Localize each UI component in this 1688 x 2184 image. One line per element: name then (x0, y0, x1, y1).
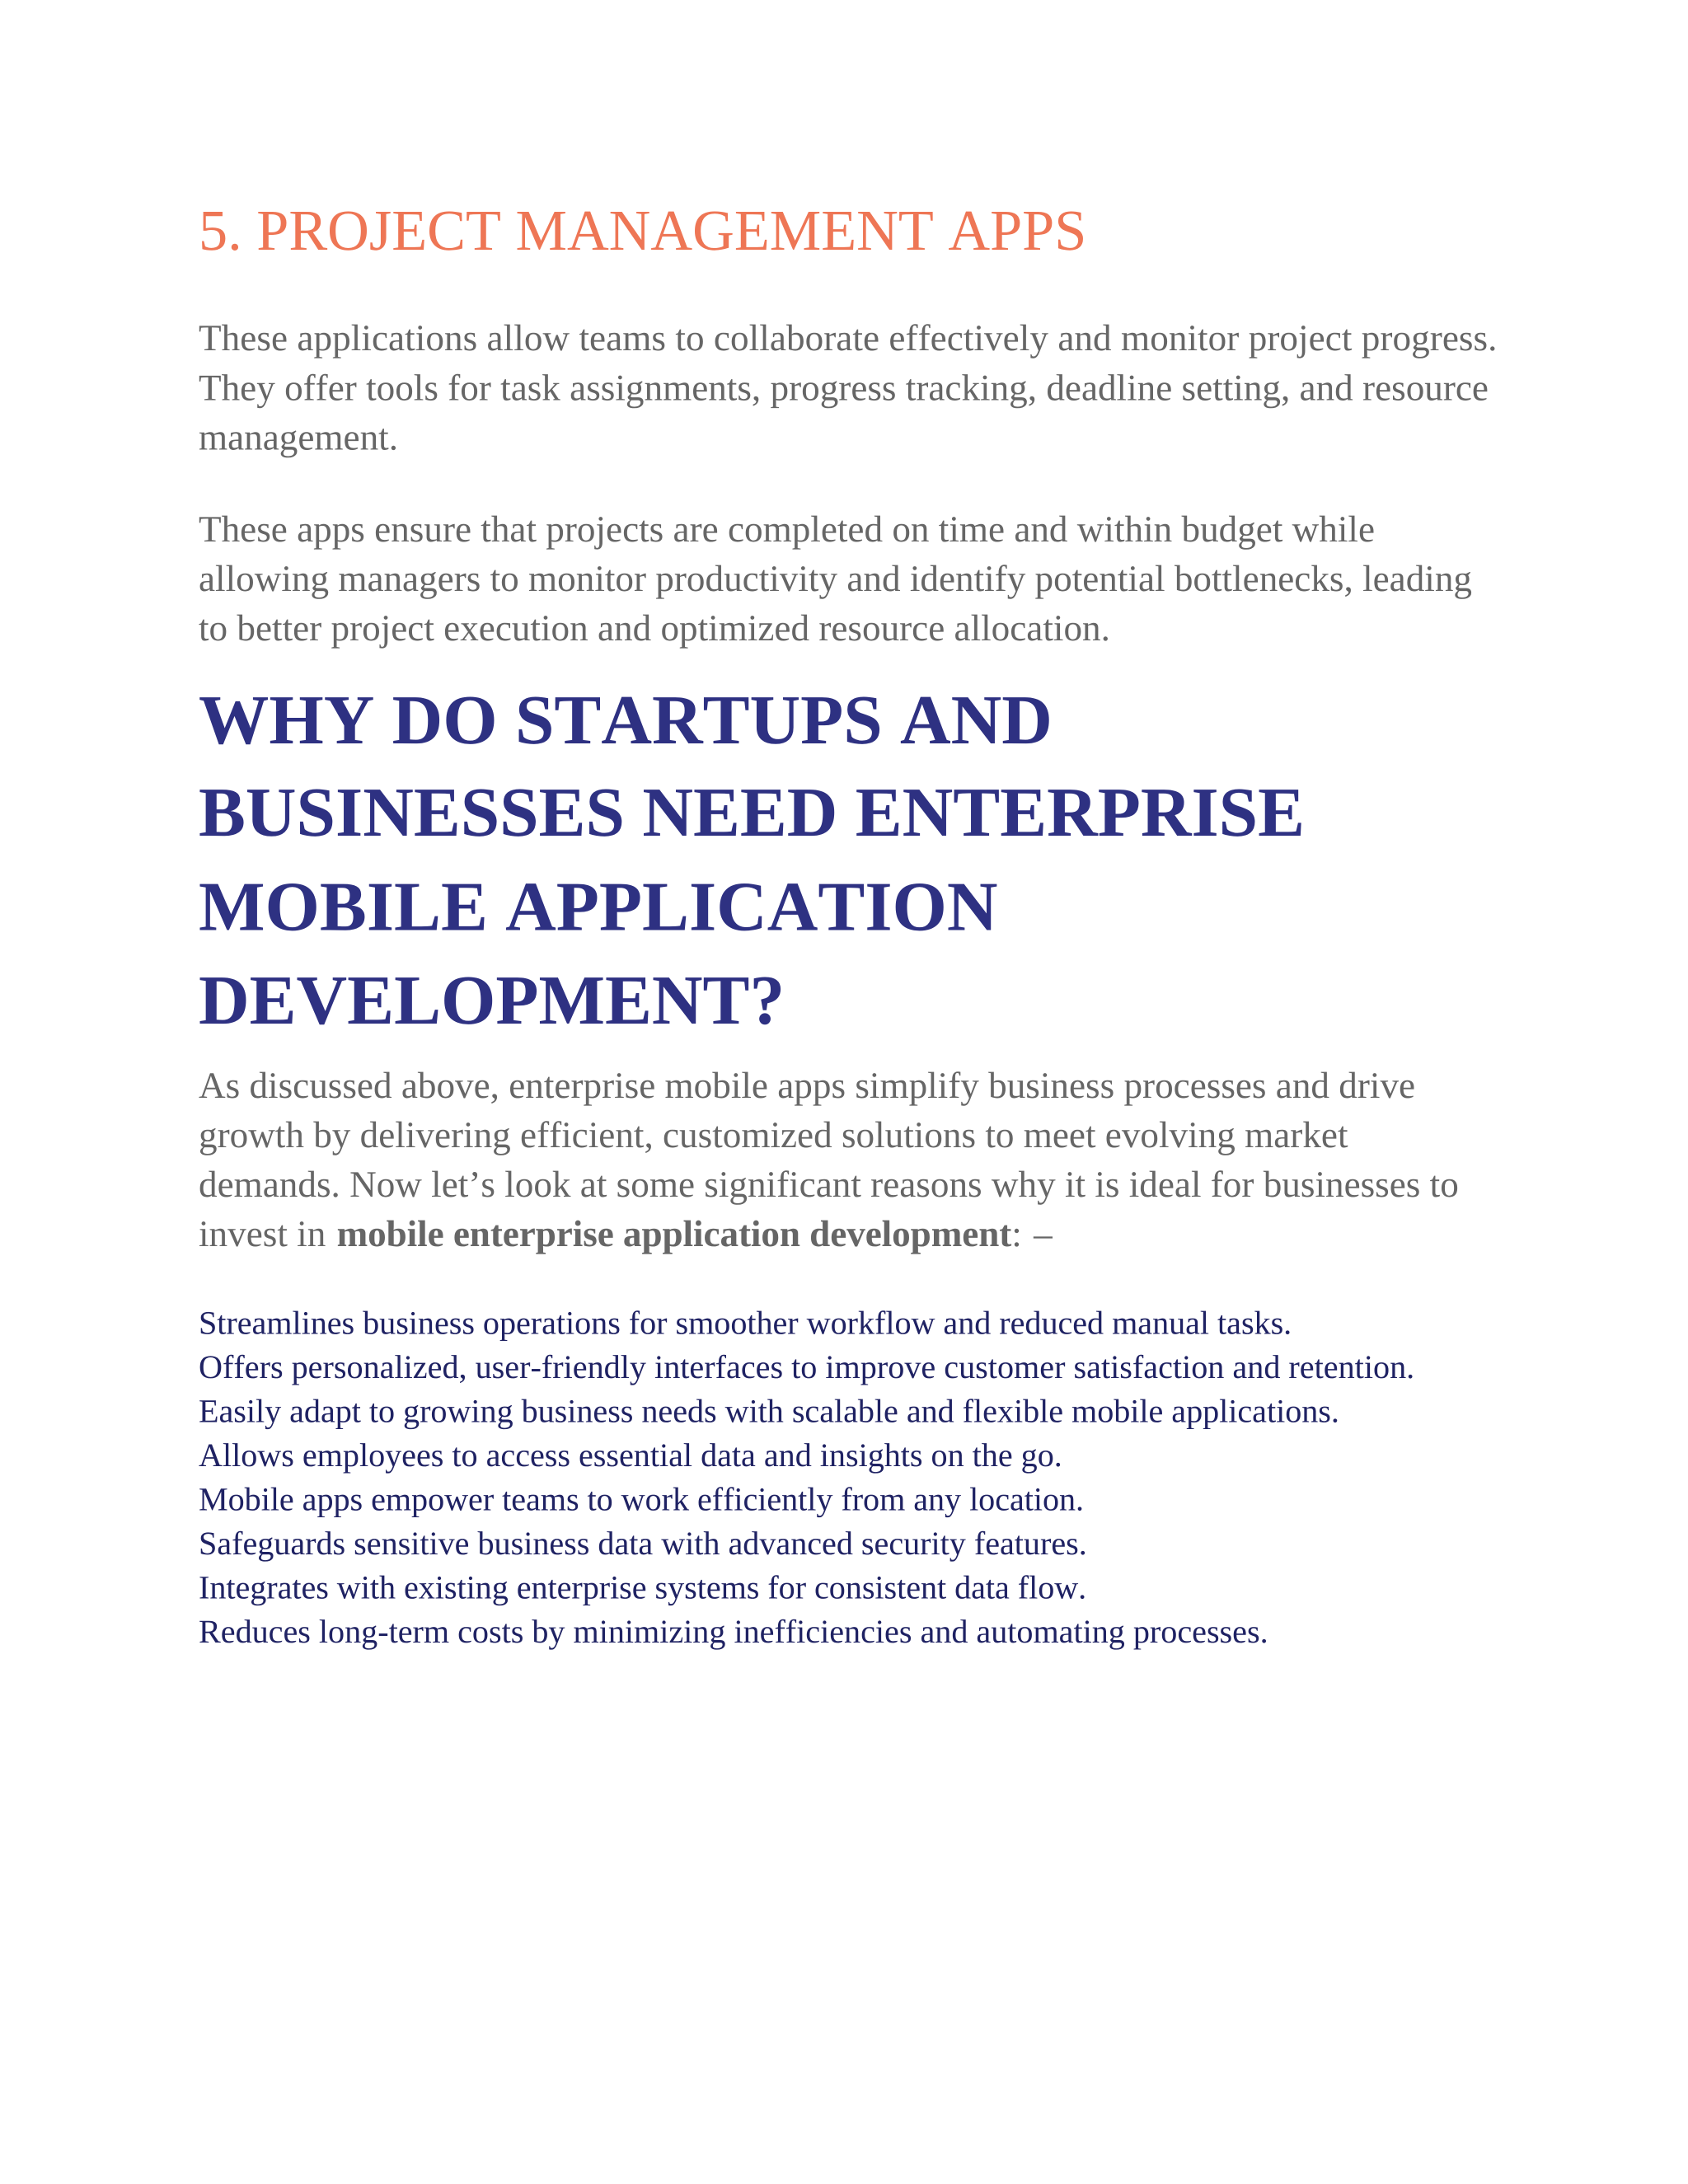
text block: apps benefits paragraph: These apps ensure that projects are completed on time and within budget while (199, 509, 1375, 550)
text block: list of benefits: Offers personalized, user-friendly interfaces to improve customer satisfaction and retention. (199, 1348, 1414, 1385)
text block: discussion paragraph: invest in mobile enterprise application development: – (199, 1213, 1053, 1254)
heading: why startups and businesses need enterprise mobile application development: BUSINESSES NEED ENTERPRISE (199, 774, 1305, 851)
text block: discussion paragraph: demands. Now let’s look at some significant reasons why it is ideal for businesses to (199, 1164, 1459, 1205)
heading: why startups and businesses need enterprise mobile application development: DEVELOPMENT? (199, 962, 785, 1039)
text block: apps intro paragraph: management. (199, 417, 398, 458)
heading: why startups and businesses need enterprise mobile application development (199, 682, 1305, 1039)
text block: discussion paragraph: As discussed above, enterprise mobile apps simplify business processes and drive (199, 1065, 1415, 1106)
heading: why startups and businesses need enterprise mobile application development: MOBILE APPLICATION (199, 869, 998, 946)
text block: list of benefits (199, 1304, 1414, 1650)
text block: list of benefits: Integrates with existing enterprise systems for consistent data flow. (199, 1569, 1086, 1605)
text block: apps intro paragraph: These applications allow teams to collaborate effectively and monitor project progress. (199, 317, 1497, 359)
text block: list of benefits: Safeguards sensitive business data with advanced security features. (199, 1525, 1087, 1562)
text block: list of benefits: Reduces long-term costs by minimizing inefficiencies and automating processes. (199, 1613, 1268, 1650)
heading: 5. Project Management Apps: 5. PROJECT MANAGEMENT APPS (199, 199, 1086, 263)
text block: discussion paragraph: growth by delivering efficient, customized solutions to meet evolving market (199, 1114, 1348, 1155)
text block: list of benefits: Streamlines business operations for smoother workflow and reduced manual tasks. (199, 1304, 1292, 1342)
text block: apps benefits paragraph (199, 509, 1472, 649)
text block: list of benefits: Easily adapt to growing business needs with scalable and flexible mobile applications. (199, 1393, 1339, 1429)
text block: discussion paragraph (199, 1065, 1459, 1254)
text block: apps benefits paragraph: allowing managers to monitor productivity and identify potential bottlenecks, leading (199, 558, 1472, 599)
text block: list of benefits: Mobile apps empower teams to work efficiently from any location. (199, 1480, 1084, 1518)
text block: apps benefits paragraph: to better project execution and optimized resource allocation. (199, 607, 1110, 649)
text block: apps intro paragraph: They offer tools for task assignments, progress tracking, deadline setting, and resource (199, 368, 1489, 409)
text block: list of benefits: Allows employees to access essential data and insights on the go. (199, 1436, 1062, 1474)
heading: why startups and businesses need enterprise mobile application development: WHY DO STARTUPS AND (199, 682, 1053, 759)
text block: apps intro paragraph (199, 317, 1497, 458)
